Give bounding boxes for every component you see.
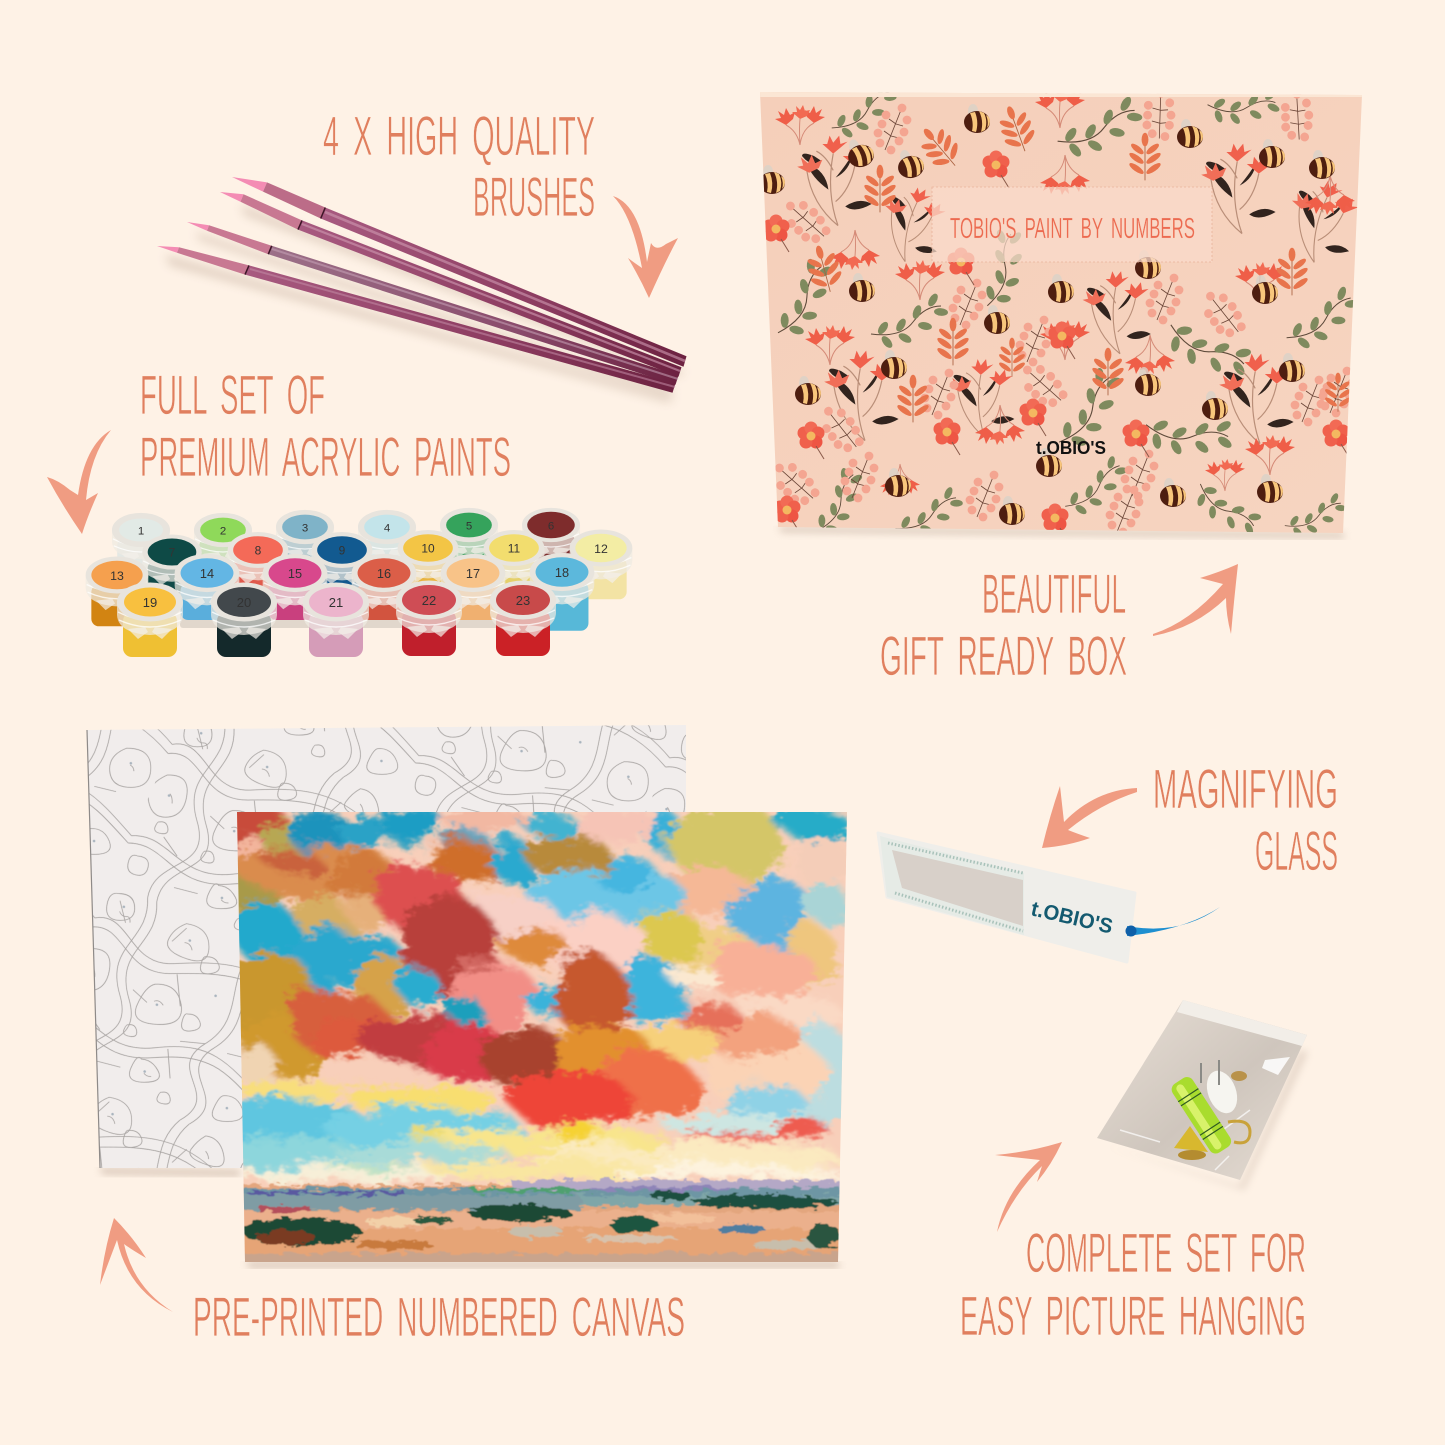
text: GLASS	[1255, 819, 1338, 882]
back row pots: 5	[466, 520, 472, 532]
front row pots: 20	[237, 595, 251, 610]
box label: TOBIO'S PAINT BY NUMBERS	[950, 213, 1195, 245]
central red	[375, 863, 466, 933]
painted canvas: sunset clouds	[237, 812, 847, 1269]
second row pots: 8	[255, 544, 262, 558]
front row pots: 19	[143, 595, 157, 610]
heading: magnifying glass	[1153, 757, 1338, 882]
paint pots	[86, 508, 632, 657]
third row pots: 14	[200, 566, 214, 581]
arrow: to hanging kit	[995, 1142, 1062, 1232]
back row pots: 3	[302, 522, 308, 534]
green spirit level	[1169, 1074, 1234, 1156]
icon: paint brushes	[157, 177, 686, 402]
brush C	[187, 222, 678, 385]
brush D	[157, 246, 676, 393]
arrow: to canvas	[100, 1218, 173, 1312]
arrow: to box	[1153, 564, 1238, 636]
heading: canvas: PRE-PRINTED NUMBERED CANVAS	[193, 1285, 685, 1348]
top band	[237, 812, 292, 852]
gift box	[753, 69, 1365, 551]
second row pots: 10	[421, 542, 435, 556]
back row pots	[112, 508, 580, 569]
box pattern: pink berries	[766, 86, 1356, 536]
third row pots: 13	[110, 569, 124, 583]
front row pots: 21	[329, 595, 343, 610]
second row pots: 9	[339, 544, 346, 558]
arrow: to magnifying glass	[1042, 786, 1137, 848]
right side	[654, 867, 757, 913]
box pattern: green sprigs	[753, 69, 1365, 551]
horizon and land	[244, 1176, 840, 1262]
box pattern: bees	[759, 104, 1335, 525]
text: BRUSHES	[473, 165, 595, 228]
heading: brushes: 4 X HIGH QUALITY	[323, 104, 595, 167]
third row pots: 17	[466, 566, 480, 581]
lower sky	[242, 1088, 366, 1149]
ribbon	[1126, 907, 1220, 936]
left orange	[239, 845, 397, 898]
front row pots	[117, 580, 556, 657]
front row pots: 22	[422, 593, 436, 608]
back row pots: 6	[548, 520, 554, 532]
back canvas: numbered sketch	[87, 725, 686, 1176]
heading: hanging kit	[960, 1221, 1306, 1347]
gold hangers	[1174, 1071, 1250, 1160]
back row pots: 2	[220, 525, 226, 537]
magnifying ruler	[878, 833, 1220, 962]
ruler logo: t.OBIO'S	[1029, 897, 1115, 939]
arrow: to brushes	[613, 196, 678, 298]
third row pots	[86, 553, 594, 631]
second row pots: 11	[508, 542, 521, 556]
brush B	[220, 192, 682, 377]
second row pots: 7	[169, 547, 175, 560]
heading: acrylic paints: FULL SET OF	[140, 363, 325, 426]
third row pots: 18	[555, 565, 569, 580]
hook	[1201, 1060, 1243, 1117]
heading: brushes	[323, 104, 595, 228]
tray	[180, 612, 530, 628]
heading: acrylic paints	[140, 363, 511, 488]
heading: gift box: GIFT READY BOX	[880, 624, 1127, 687]
back row pots: 4	[384, 522, 391, 534]
third row pots: 15	[288, 566, 302, 581]
box pattern: orange leaves	[801, 101, 1352, 422]
yellow band	[227, 1080, 346, 1100]
front row pots: 23	[516, 593, 530, 608]
box label	[932, 187, 1212, 262]
box logo: t.OBIO'S	[1036, 438, 1106, 458]
text: BEAUTIFUL	[982, 562, 1126, 625]
sky brush strokes	[209, 802, 856, 1183]
arrow: to paints	[47, 430, 111, 534]
back row pots: 1	[138, 525, 144, 537]
second row pots: 12	[594, 542, 608, 556]
second row pots	[142, 529, 632, 599]
hanging kit bag	[1097, 1000, 1308, 1190]
box pattern: coral sprays	[775, 88, 1355, 496]
heading: gift box	[880, 562, 1127, 687]
brush A	[232, 177, 686, 367]
box pattern: red flowers	[762, 150, 1350, 541]
box pattern: stems with black leaves	[797, 136, 1365, 444]
third row pots: 16	[377, 566, 391, 581]
text: PREMIUM ACRYLIC PAINTS	[140, 425, 511, 488]
